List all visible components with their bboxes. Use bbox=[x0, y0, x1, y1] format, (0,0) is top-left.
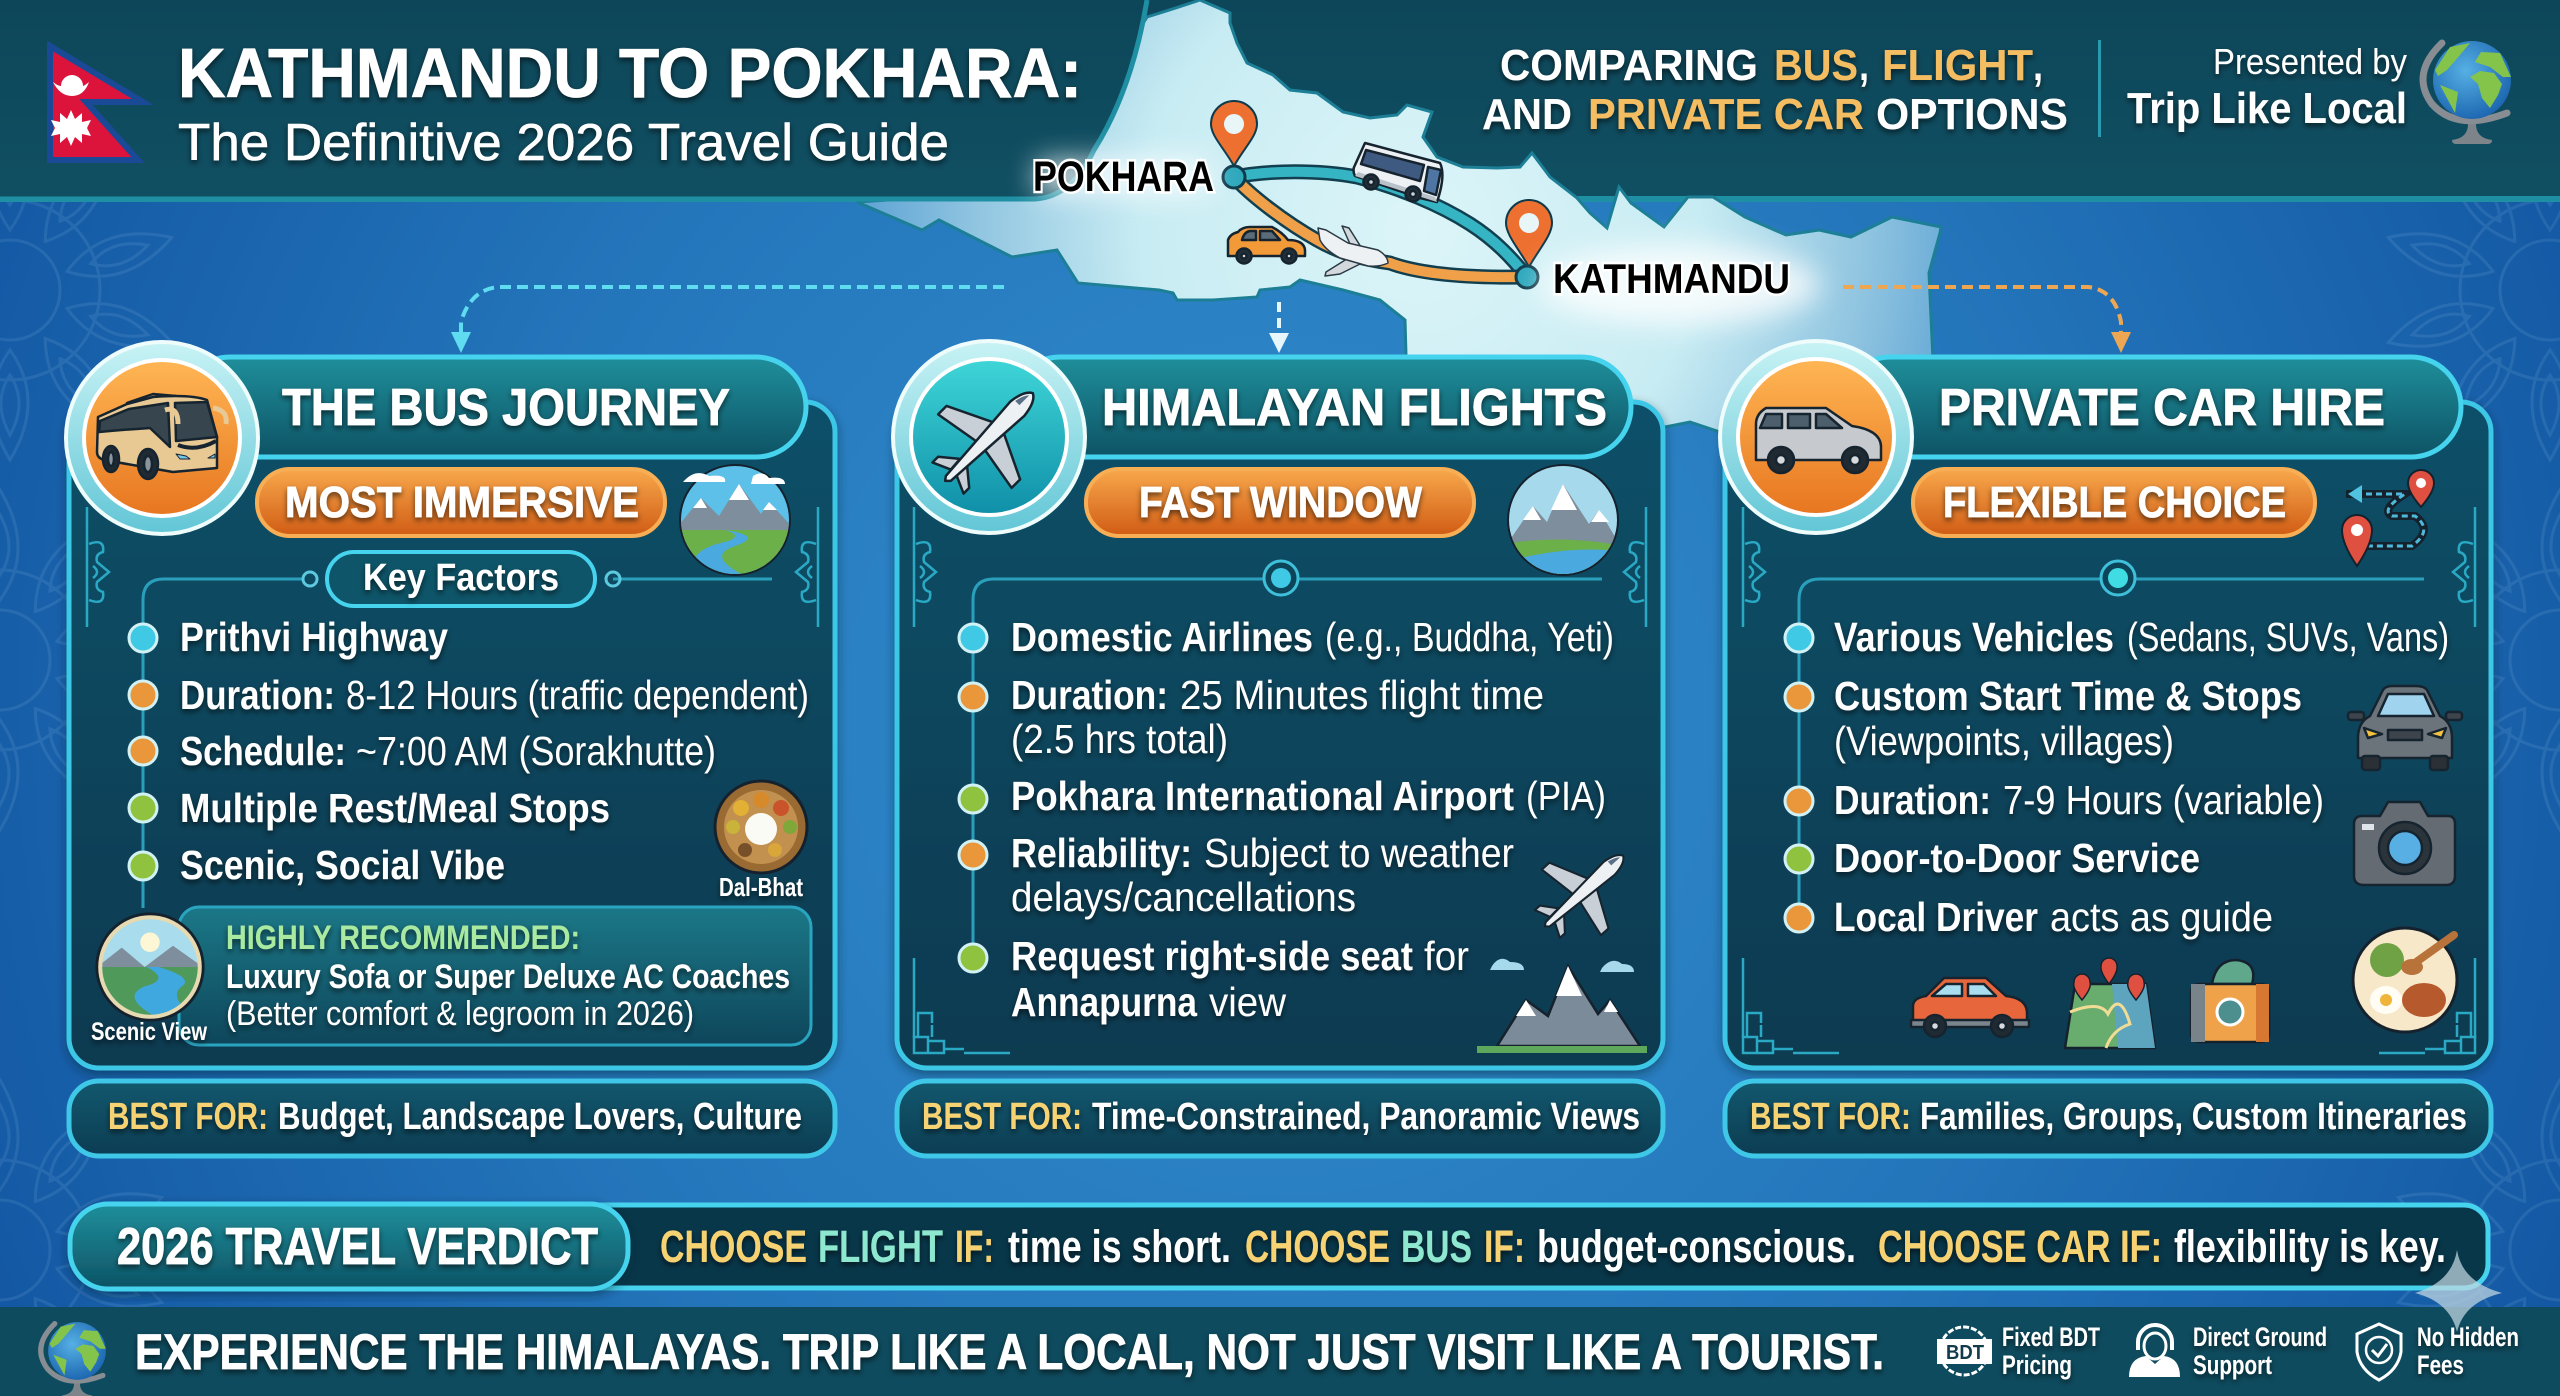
ornaments bbox=[87, 507, 818, 627]
verdict text: CHOOSE bbox=[1245, 1221, 1390, 1272]
heading: THE BUS JOURNEY bbox=[282, 379, 730, 437]
header band bbox=[0, 0, 2560, 202]
heading: comparing options: BUS bbox=[1774, 41, 1858, 90]
best for: bus: BEST FOR: bbox=[108, 1096, 268, 1138]
card body bbox=[897, 402, 1663, 1068]
icon: Kathmandu pin bbox=[1506, 200, 1552, 288]
icon: car on map bbox=[1228, 227, 1305, 264]
presented by: Trip Like Local bbox=[2127, 84, 2407, 133]
best for: car bbox=[1725, 1081, 2491, 1156]
icon: mountains and river bbox=[675, 464, 795, 580]
bullet list: for bbox=[1424, 933, 1469, 979]
panel: himalayan flights bbox=[893, 341, 1663, 1156]
badge: fixed BDT pricing: Pricing bbox=[2002, 1350, 2072, 1380]
icon: car in circle bbox=[1720, 341, 1912, 533]
badge: no hidden fees: Fees bbox=[2417, 1350, 2464, 1380]
map of Nepal bbox=[857, 0, 1941, 440]
badge: fixed BDT pricing: BDT bbox=[1946, 1342, 1984, 1364]
bullet list: acts as guide bbox=[2050, 894, 2273, 940]
bullet list: Duration: bbox=[1011, 672, 1168, 718]
route map bbox=[1033, 101, 1820, 325]
verdict bar bbox=[70, 1204, 2488, 1289]
icon: camera bbox=[2354, 802, 2455, 885]
label: scenic view: Scenic View bbox=[91, 1018, 207, 1046]
verdict label bbox=[70, 1204, 628, 1289]
best for: flights: Time-Constrained, Panoramic Views bbox=[1092, 1096, 1640, 1138]
bullet list: Subject to weather bbox=[1204, 830, 1514, 876]
heading: comparing options: COMPARING bbox=[1500, 41, 1758, 90]
bullet list: (Viewpoints, villages) bbox=[1834, 718, 2174, 764]
verdict text: flexibility is key. bbox=[2174, 1221, 2446, 1272]
presented by bbox=[2127, 41, 2407, 133]
label: Pokhara: POKHARA bbox=[1033, 153, 1214, 201]
badge bbox=[257, 469, 665, 536]
header left edge and rule bbox=[0, 0, 1147, 199]
badge: direct ground support: Direct Ground bbox=[2193, 1322, 2327, 1352]
recommended box bbox=[179, 907, 811, 1045]
route: bus bbox=[1234, 172, 1527, 277]
heading: comparing options: OPTIONS bbox=[1876, 90, 2068, 139]
heading: HIMALAYAN FLIGHTS bbox=[1102, 379, 1607, 437]
bullet list: ~7:00 AM (Sorakhutte) bbox=[356, 728, 716, 774]
icon: globe bbox=[2423, 41, 2511, 144]
icon: bus on map bbox=[1354, 143, 1442, 202]
bullet list: Domestic Airlines bbox=[1011, 614, 1313, 660]
badge: FLEXIBLE CHOICE bbox=[1943, 478, 2286, 527]
recommended box: HIGHLY RECOMMENDED: bbox=[226, 919, 580, 957]
heading: PRIVATE CAR HIRE bbox=[1939, 379, 2385, 437]
recommended box: (Better comfort & legroom in 2026) bbox=[226, 995, 694, 1033]
connector node bbox=[1264, 561, 1298, 595]
icon: suitcase bbox=[2191, 960, 2269, 1042]
best for: car: BEST FOR: bbox=[1750, 1096, 1911, 1138]
footer band bbox=[0, 1307, 2560, 1396]
sparkle bbox=[2415, 1250, 2502, 1332]
panel: private car hire bbox=[1720, 341, 2491, 1156]
heading: comparing options: AND bbox=[1482, 90, 1572, 139]
icon: plane bbox=[1515, 823, 1653, 959]
badge: MOST IMMERSIVE bbox=[285, 478, 639, 527]
label: dal-bhat: Dal-Bhat bbox=[719, 872, 803, 902]
divider bbox=[2098, 40, 2101, 137]
best for: bus: Budget, Landscape Lovers, Culture bbox=[278, 1096, 802, 1138]
verdict label: 2026 TRAVEL VERDICT bbox=[117, 1218, 598, 1276]
verdict text bbox=[660, 1221, 2446, 1272]
bullet list: 7-9 Hours (variable) bbox=[2003, 777, 2324, 823]
ornaments bbox=[1743, 507, 2475, 1053]
title: KATHMANDU TO POKHARA: bbox=[178, 34, 1082, 112]
bullet list: Door-to-Door Service bbox=[1834, 835, 2200, 881]
bullet list bbox=[1785, 614, 2449, 940]
bullet list: Multiple Rest/Meal Stops bbox=[180, 785, 610, 831]
bullet list: 25 Minutes flight time bbox=[1180, 672, 1544, 718]
arrow: to flights bbox=[1269, 302, 1289, 353]
badge: no hidden fees bbox=[2357, 1322, 2519, 1380]
bullet list: (Sedans, SUVs, Vans) bbox=[2127, 614, 2449, 660]
header pill bbox=[1840, 357, 2461, 457]
verdict text: FLIGHT bbox=[818, 1221, 943, 1272]
verdict text: BUS bbox=[1401, 1221, 1472, 1272]
badge: fixed BDT pricing bbox=[1937, 1322, 2100, 1380]
key factors pill: Key Factors bbox=[363, 557, 559, 599]
card body bbox=[69, 402, 835, 1068]
key factors pill bbox=[303, 552, 620, 606]
best for: flights: BEST FOR: bbox=[922, 1096, 1082, 1138]
badge: direct ground support bbox=[2129, 1322, 2327, 1380]
label glow bbox=[1035, 160, 1820, 325]
badge bbox=[1913, 469, 2315, 536]
label: Kathmandu: KATHMANDU bbox=[1553, 255, 1790, 302]
icon: mountains bbox=[1477, 959, 1647, 1053]
presented by: Presented by bbox=[2213, 41, 2407, 82]
icon: Pokhara pin bbox=[1211, 101, 1257, 188]
arrow: to bus bbox=[451, 287, 1004, 353]
icon: winding route bbox=[2342, 470, 2434, 566]
bullet list: Various Vehicles bbox=[1834, 614, 2114, 660]
verdict text: CHOOSE bbox=[660, 1221, 807, 1272]
bullet list: 8-12 Hours (traffic dependent) bbox=[346, 672, 809, 718]
route: flight and car bbox=[1234, 177, 1527, 277]
bullet list: Duration: bbox=[180, 672, 335, 718]
title bbox=[178, 34, 1082, 172]
best for: bus bbox=[69, 1081, 835, 1156]
recommended box: Luxury Sofa or Super Deluxe AC Coaches bbox=[226, 958, 790, 996]
bullet list bbox=[959, 614, 1614, 1025]
badge: fixed BDT pricing: Fixed BDT bbox=[2002, 1322, 2100, 1352]
arrow: to car bbox=[1843, 287, 2131, 353]
bullet list: Prithvi Highway bbox=[180, 614, 448, 660]
verdict text: time is short. bbox=[1008, 1221, 1231, 1272]
heading: comparing options bbox=[1482, 41, 2068, 139]
header pill bbox=[1010, 357, 1631, 457]
heading: comparing options: PRIVATE CAR bbox=[1588, 90, 1864, 139]
ornaments bbox=[914, 507, 1646, 1053]
icon: red car bbox=[1911, 978, 2029, 1037]
verdict text: IF: bbox=[955, 1221, 994, 1272]
bullet list: Scenic, Social Vibe bbox=[180, 842, 505, 888]
bullet list: Schedule: bbox=[180, 728, 346, 774]
bullet list: (PIA) bbox=[1526, 773, 1606, 819]
bullet list: Local Driver bbox=[1834, 894, 2038, 940]
bullet list: Custom Start Time & Stops bbox=[1834, 673, 2302, 719]
icon: footer globe bbox=[41, 1322, 106, 1396]
bullet list: view bbox=[1209, 979, 1286, 1025]
list connector bbox=[143, 579, 772, 908]
badge bbox=[1086, 469, 1474, 536]
bullet list: (e.g., Buddha, Yeti) bbox=[1325, 614, 1614, 660]
heading: comparing options: FLIGHT bbox=[1882, 41, 2033, 90]
bullet list: Request right-side seat bbox=[1011, 933, 1413, 979]
icon: front car bbox=[2348, 686, 2462, 770]
heading: comparing options: , bbox=[1859, 41, 1869, 90]
footer tagline: EXPERIENCE THE HIMALAYAS. TRIP LIKE A LOCAL, NOT JUST VISIT LIKE A TOURIST. bbox=[135, 1324, 1884, 1380]
icon: plane on map bbox=[1318, 226, 1388, 276]
header left panel bbox=[0, 0, 1147, 197]
badge: direct ground support: Support bbox=[2193, 1350, 2272, 1380]
icon: dal-bhat plate bbox=[715, 781, 807, 873]
icon: food bowl bbox=[2353, 928, 2457, 1032]
best for: flights bbox=[897, 1081, 1663, 1156]
bullet list: Duration: bbox=[1834, 777, 1991, 823]
icon: scenic view bbox=[97, 914, 203, 1020]
bullet list: delays/cancellations bbox=[1011, 874, 1356, 920]
verdict text: CHOOSE CAR IF: bbox=[1878, 1221, 2162, 1272]
bullet list: Pokhara International Airport bbox=[1011, 773, 1514, 819]
verdict text: budget-conscious. bbox=[1537, 1221, 1856, 1272]
connector node bbox=[2101, 561, 2135, 595]
heading: comparing options: , bbox=[2033, 41, 2043, 90]
bullet list bbox=[129, 614, 809, 888]
bullet list: Reliability: bbox=[1011, 830, 1192, 876]
badge: no hidden fees: No Hidden bbox=[2417, 1322, 2519, 1352]
list connector bbox=[973, 579, 1602, 960]
badge: FAST WINDOW bbox=[1139, 478, 1422, 527]
icon: Nepal flag bbox=[50, 46, 143, 160]
panel: bus journey bbox=[66, 342, 835, 1156]
verdict text: IF: bbox=[1484, 1221, 1525, 1272]
bullet list: Annapurna bbox=[1011, 979, 1198, 1025]
header pill bbox=[180, 357, 806, 457]
icon: plane in circle bbox=[893, 341, 1085, 533]
card body bbox=[1725, 402, 2491, 1068]
bullet list: (2.5 hrs total) bbox=[1011, 716, 1228, 762]
title: The Definitive 2026 Travel Guide bbox=[178, 114, 949, 172]
icon: map with pins bbox=[2065, 958, 2155, 1048]
icon: bus in circle bbox=[66, 342, 258, 534]
list connector bbox=[1799, 579, 2424, 930]
icon: mountain circle bbox=[1503, 464, 1623, 580]
